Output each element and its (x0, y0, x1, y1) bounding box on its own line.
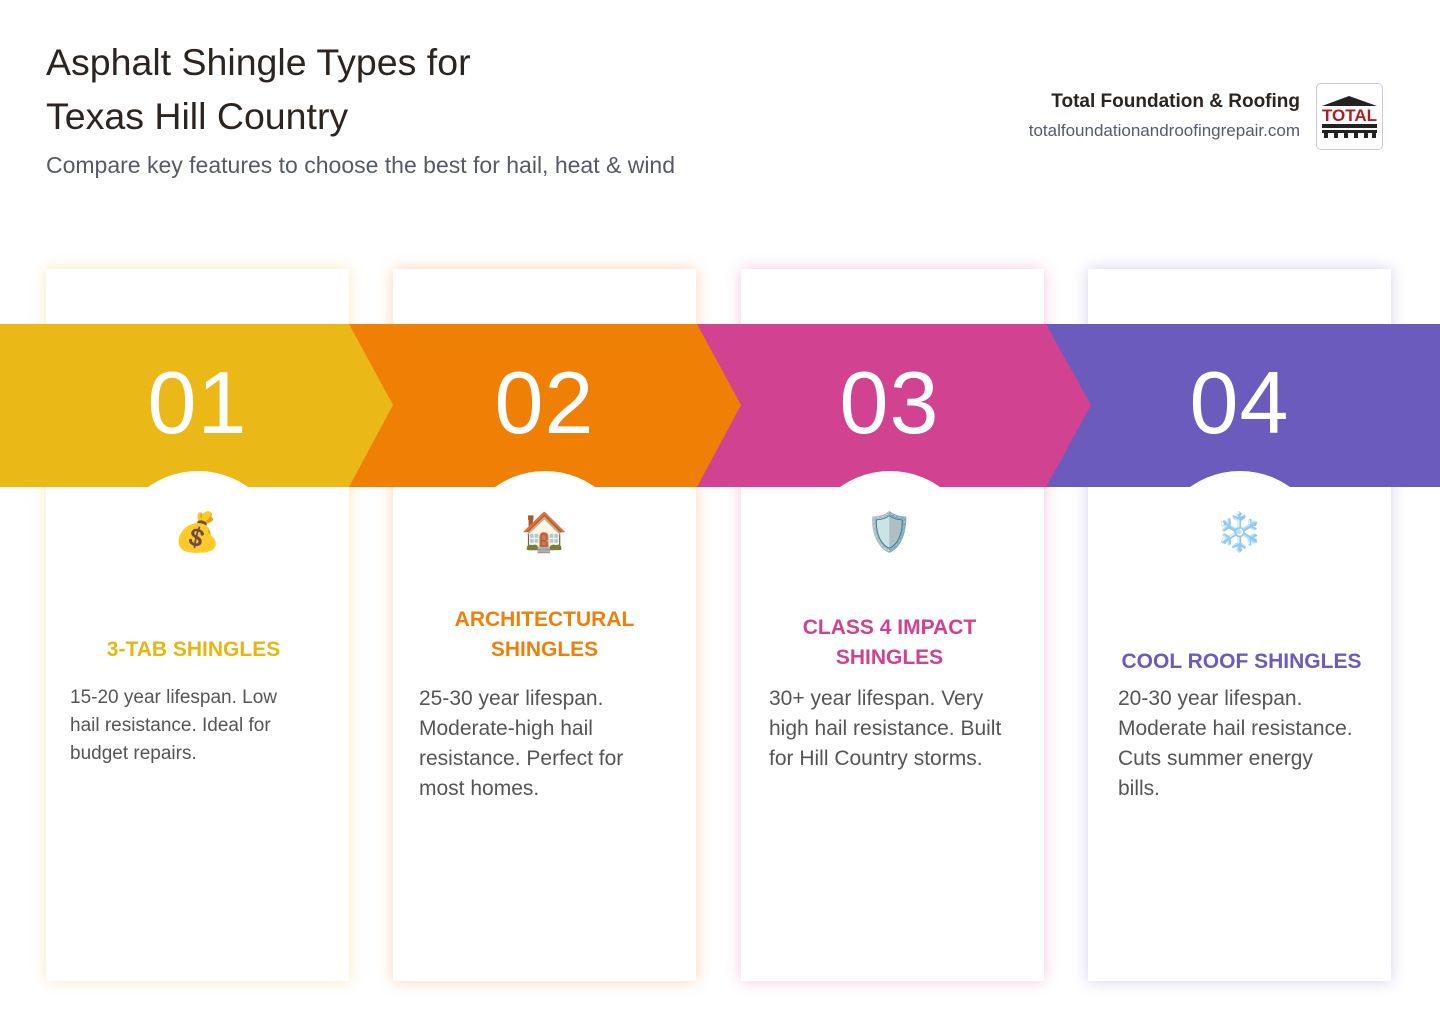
title: Texas Hill Country (46, 95, 348, 137)
text: class 4 (769, 687, 1002, 770)
text: class 4: high hail resistance. Built (769, 717, 1001, 740)
title: 3-tab: 3-TAB SHINGLES (107, 638, 280, 661)
text: cool roof: Cuts summer energy (1118, 747, 1313, 770)
logo: TOTAL (1322, 106, 1377, 125)
title: architectural (455, 608, 634, 661)
icon: snowflake: ❄️ (1216, 512, 1263, 554)
text: architectural: resistance. Perfect for (419, 747, 623, 770)
number 02: 02 (495, 353, 594, 452)
title: class 4: SHINGLES (836, 646, 943, 669)
text: 3-tab: 15-20 year lifespan. Low (70, 687, 277, 708)
card 1 (46, 269, 349, 981)
card 4 (1088, 269, 1391, 981)
number 01: 01 (148, 353, 247, 452)
text: 3-tab: budget repairs. (70, 743, 197, 764)
number 04: 04 (1190, 353, 1289, 452)
title (46, 41, 471, 137)
icon: money bag: 💰 (174, 512, 221, 554)
text: cool roof: Moderate hail resistance. (1118, 717, 1353, 740)
logo (1316, 83, 1383, 150)
text: architectural (419, 687, 623, 800)
text: architectural: 25-30 year lifespan. (419, 687, 603, 710)
title: architectural: SHINGLES (491, 638, 598, 661)
text: class 4: 30+ year lifespan. Very (769, 687, 983, 710)
text: cool roof: bills. (1118, 777, 1160, 800)
card 2 (393, 269, 696, 981)
text: architectural: most homes. (419, 777, 539, 800)
text: class 4: for Hill Country storms. (769, 747, 983, 770)
icon: shield: 🛡️ (866, 512, 913, 554)
text: architectural: Moderate-high hail (419, 717, 593, 740)
text: 3-tab (70, 687, 277, 764)
text: 3-tab: hail resistance. Ideal for (70, 715, 271, 736)
arrow band (0, 324, 1440, 487)
icon: house: 🏠 (521, 512, 568, 554)
title: cool roof: COOL ROOF SHINGLES (1122, 650, 1361, 673)
text: cool roof (1118, 687, 1353, 800)
brand name: Total Foundation & Roofing (1051, 91, 1300, 112)
text: cool roof: 20-30 year lifespan. (1118, 687, 1302, 710)
title: class 4: CLASS 4 IMPACT (803, 616, 976, 639)
title: architectural: ARCHITECTURAL (455, 608, 634, 631)
number 03: 03 (840, 353, 939, 452)
brand block (1029, 83, 1383, 150)
title: class 4 (803, 616, 976, 669)
title: Asphalt Shingle Types for (46, 41, 471, 83)
subtitle: Compare key features to choose the best for hail, heat & wind (46, 152, 675, 178)
card 3 (741, 269, 1044, 981)
brand url: totalfoundationandroofingrepair.com (1029, 121, 1300, 140)
